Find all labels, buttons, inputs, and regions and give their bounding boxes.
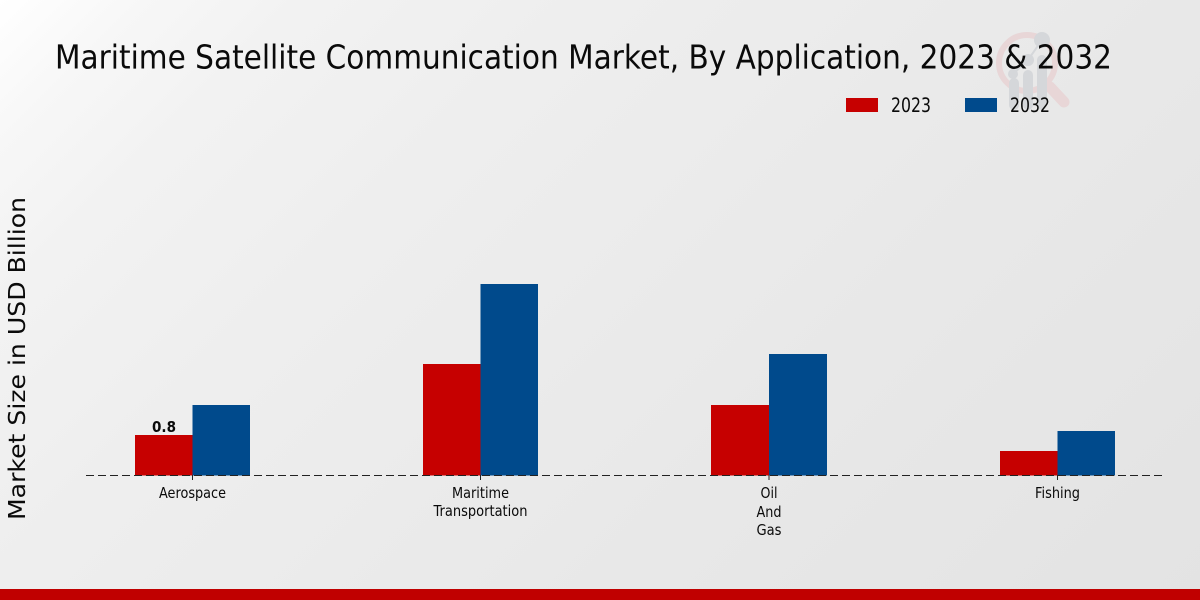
category label: Oil And Gas: And xyxy=(756,503,782,521)
bars: Aerospace xyxy=(135,405,250,476)
icon: watermark logo xyxy=(999,32,1064,110)
category label: Oil And Gas xyxy=(756,484,782,539)
bars: Fishing xyxy=(1000,431,1115,476)
category label: Aerospace: Aerospace xyxy=(159,484,226,502)
bar chart xyxy=(86,284,1164,539)
data label: 0.8: 0.8 xyxy=(152,418,176,436)
title: Maritime Satellite Communication Market, By Application, 2023 & 2032 xyxy=(55,38,1112,76)
bars: Maritime Transportation xyxy=(423,284,538,476)
category label: Fishing: Fishing xyxy=(1035,484,1080,502)
category label: Oil And Gas: Gas xyxy=(756,521,782,539)
legend item: 2032 xyxy=(965,94,1050,117)
category label: Oil And Gas: Oil xyxy=(760,484,778,502)
bars: Oil And Gas xyxy=(711,354,827,476)
y-axis label: Market Size in USD Billion xyxy=(3,197,31,520)
category label: Maritime Transportation: Transportation xyxy=(433,502,528,520)
legend item: 2032: 2032 xyxy=(1010,94,1050,117)
category label: Maritime Transportation: Maritime xyxy=(452,484,509,502)
footer bar xyxy=(0,589,1200,600)
legend xyxy=(846,94,1050,117)
category label: Maritime Transportation xyxy=(433,484,528,520)
legend item: 2023 xyxy=(846,94,931,117)
legend item: 2023: 2023 xyxy=(891,94,931,117)
